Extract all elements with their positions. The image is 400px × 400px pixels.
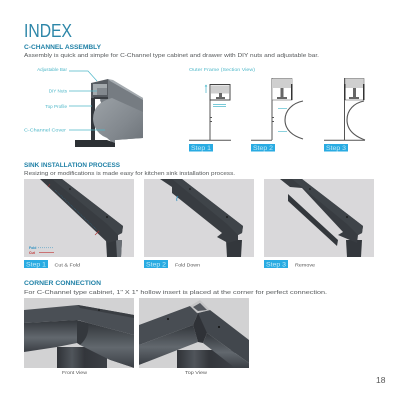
callout: top profile bbox=[45, 104, 92, 109]
step 3 badge: Step 3 bbox=[326, 145, 347, 152]
diagram: section step 2 bbox=[251, 78, 303, 140]
step 1 sink badge bbox=[24, 260, 48, 268]
title: INDEX bbox=[24, 20, 72, 41]
heading: c-channel assembly: C-CHANNEL ASSEMBLY bbox=[24, 44, 102, 51]
text: corner description: For C-Channel type cabinet, 1" X 1" hollow insert is placed at the corner for perfect connection. bbox=[24, 290, 328, 296]
caption: top view: Top View bbox=[185, 370, 208, 375]
step 1 badge: Step 1 bbox=[191, 145, 212, 152]
step 2 badge: Step 2 bbox=[253, 145, 274, 152]
text: remove: Remove bbox=[295, 262, 316, 268]
legend: fold and cut: Cut bbox=[29, 251, 36, 255]
diagram: section step 1 bbox=[189, 84, 231, 140]
callout: adjustable bar: Adjustable Bar bbox=[37, 67, 67, 72]
diagram: section step 3 bbox=[324, 78, 365, 140]
callout: c-channel cover: C-Channel Cover bbox=[24, 128, 67, 132]
callout: adjustable bar bbox=[37, 67, 97, 81]
text: fold down: Fold Down bbox=[175, 262, 200, 268]
panel: top view photo bbox=[139, 298, 249, 368]
callout: diy nuts bbox=[49, 88, 97, 94]
text: assembly description: Assembly is quick and simple for C-Channel type cabinet and drawer with DIY nuts and adjustable bar. bbox=[24, 53, 320, 59]
step 3 sink badge: Step 3 bbox=[266, 262, 287, 268]
text: sink description: Resizing or modifications is made easy for kitchen sink installation process. bbox=[24, 171, 236, 177]
step 2 badge bbox=[251, 144, 275, 152]
panel: front view photo bbox=[24, 298, 134, 368]
legend: fold and cut bbox=[29, 246, 54, 255]
page number: 18 bbox=[376, 375, 386, 385]
legend: fold and cut: Fold bbox=[29, 246, 36, 250]
heading: corner connection: CORNER CONNECTION bbox=[24, 280, 101, 287]
callout: c-channel cover bbox=[24, 128, 105, 132]
step 2 sink badge bbox=[144, 260, 168, 268]
label: outer frame: Outer Frame (Section View) bbox=[189, 67, 256, 72]
panel: sink step 3 photo bbox=[264, 179, 374, 257]
panel: sink step 1 photo bbox=[24, 179, 134, 257]
step 1 sink badge: Step 1 bbox=[26, 262, 47, 268]
caption: front view: Front View bbox=[62, 370, 88, 375]
heading: sink installation process: SINK INSTALLATION PROCESS bbox=[24, 162, 121, 169]
text: cut and fold: Cut & Fold bbox=[54, 262, 81, 268]
step 3 sink badge bbox=[264, 260, 288, 268]
panel: sink step 2 photo bbox=[144, 179, 254, 257]
diagram: c-channel profile bbox=[75, 79, 143, 147]
callout: diy nuts: DIY Nuts bbox=[49, 88, 68, 94]
callout: top profile: Top Profile bbox=[45, 104, 67, 109]
step 1 badge bbox=[189, 144, 213, 152]
step 3 badge bbox=[324, 144, 348, 152]
step 2 sink badge: Step 2 bbox=[146, 262, 167, 268]
